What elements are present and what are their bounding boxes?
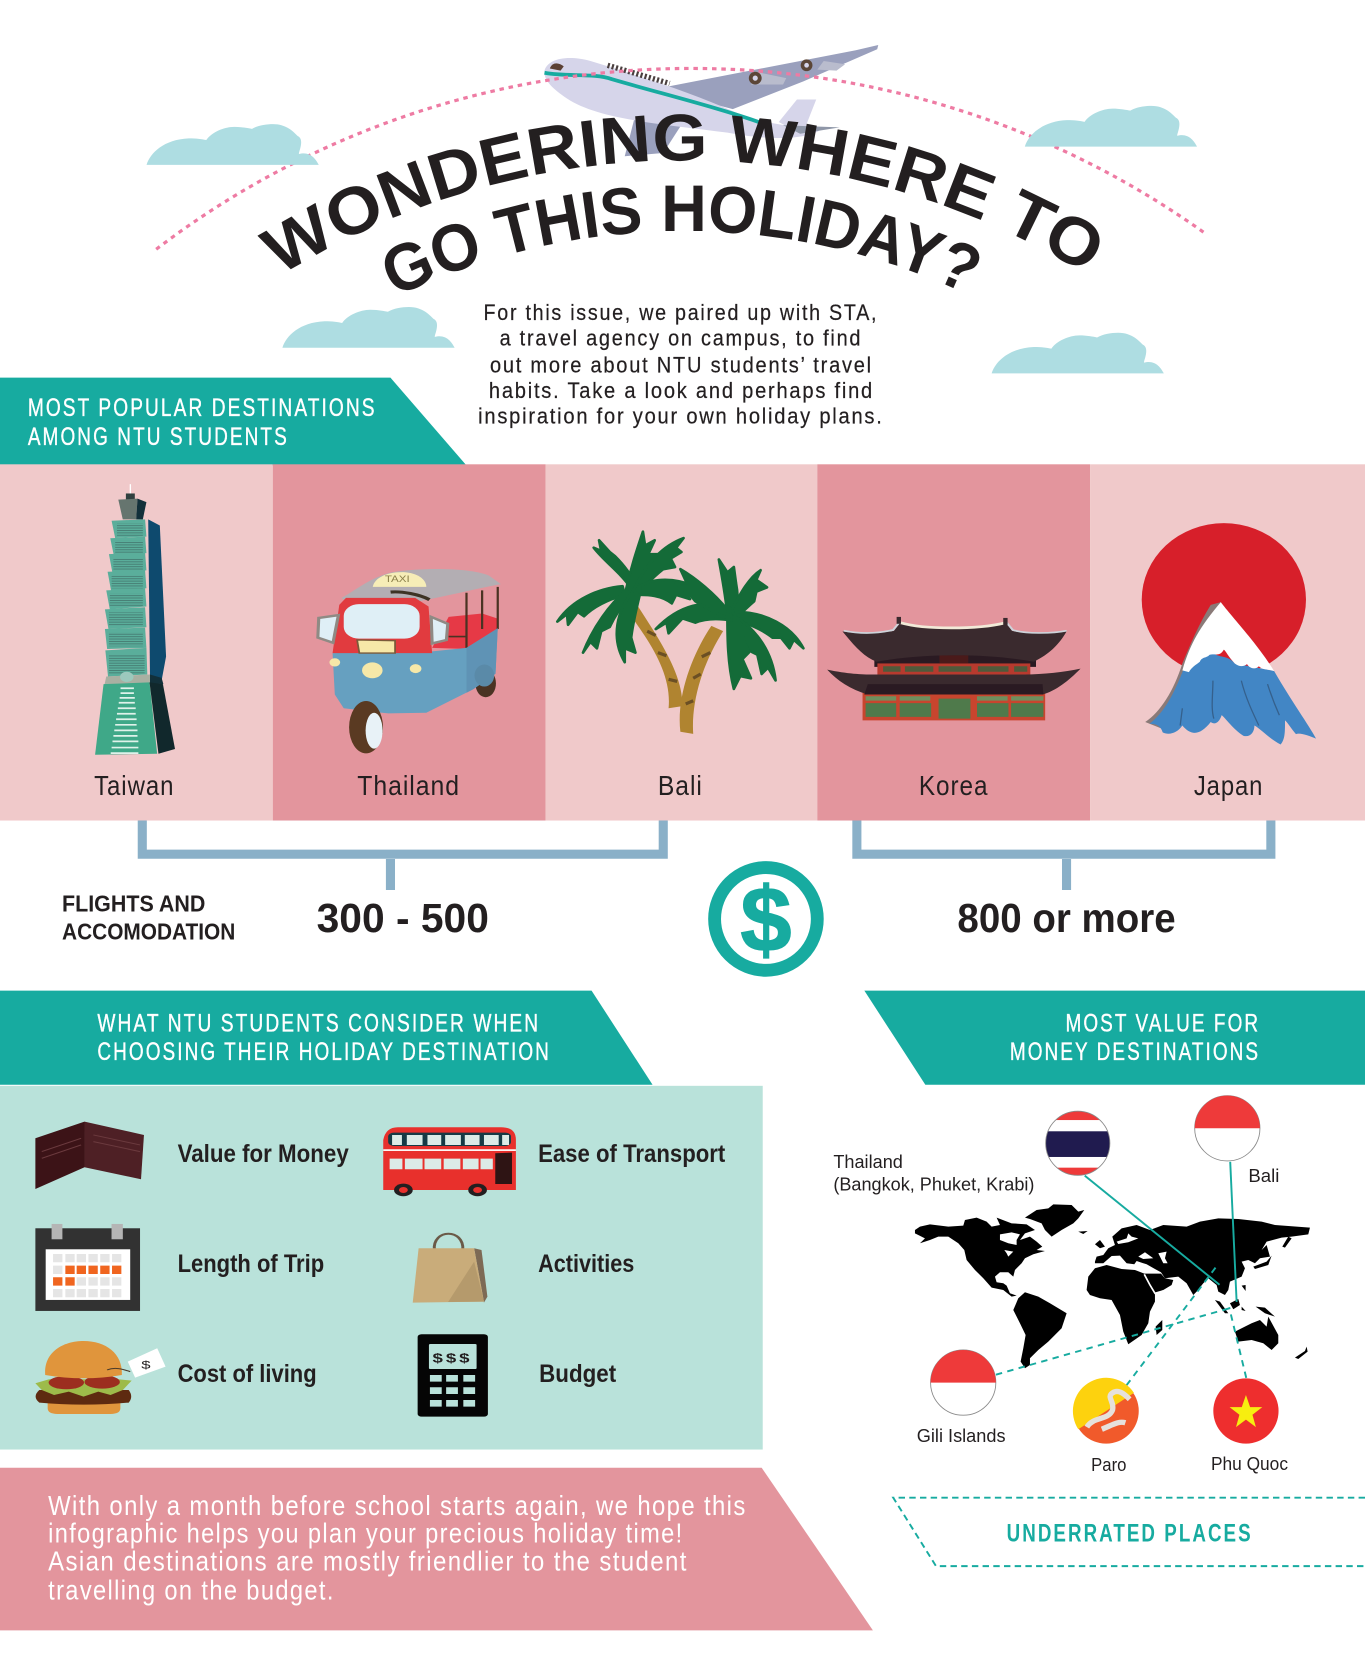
map labels: Bali (1248, 1165, 1279, 1186)
flight path dotted arc (156, 68, 1203, 249)
title: WONDERING WHERE TO (258, 114, 1100, 270)
map labels: (Bangkok, Phuket, Krabi) (833, 1174, 1034, 1195)
flag: Thailand (1045, 1110, 1110, 1177)
panel: Taiwan (0, 464, 273, 821)
label: activities: Activities (538, 1251, 634, 1278)
dashed connectors (996, 1267, 1246, 1385)
price: 300 - 500: 300 - 500 (317, 895, 489, 941)
cloud middle left (282, 307, 455, 348)
map: Europe Asia Africa Oceania (1087, 1218, 1310, 1359)
heading: what NTU students consider: WHAT NTU STUDENTS CONSIDER WHEN (97, 1010, 540, 1037)
intro text: inspiration for your own holiday plans. (478, 404, 884, 429)
label: value for money: Value for Money (178, 1141, 349, 1168)
closing message panel: With only a month before school starts again, we hope this (48, 1490, 747, 1521)
closing message panel: travelling on the budget. (48, 1574, 335, 1605)
heading: most value for money: MONEY DESTINATIONS (1010, 1039, 1260, 1066)
heading: most popular destinations (0, 378, 466, 465)
map labels: Phu Quoc (1211, 1453, 1288, 1474)
label: flights and accomodation (62, 890, 235, 944)
intro text: a travel agency on campus, to find (500, 326, 862, 351)
heading: most value for money: MOST VALUE FOR (1065, 1010, 1260, 1037)
icon: dollar coin (715, 868, 817, 971)
flag: Bali (1195, 1096, 1260, 1161)
intro text (478, 300, 884, 429)
label: flights and accomodation: FLIGHTS AND (62, 890, 205, 916)
world map (915, 1204, 1310, 1368)
solid connector: Thailand (1085, 1176, 1220, 1285)
label: flights and accomodation: ACCOMODATION (62, 918, 235, 944)
panel: Japan (1090, 464, 1365, 821)
panel: Thailand (273, 464, 546, 821)
icon: Korean palace (827, 617, 1081, 720)
bracket: 300 - 500 (142, 821, 663, 890)
heading: most value for money (864, 991, 1365, 1085)
intro text: For this issue, we paired up with STA, (484, 300, 878, 325)
icon: tuk-tuk (318, 569, 501, 753)
icon: calculator: $$$ (433, 1352, 473, 1366)
callout: underrated places: UNDERRATED PLACES (1007, 1521, 1253, 1548)
intro text: habits. Take a look and perhaps find (489, 378, 874, 403)
label: ease of transport: Ease of Transport (538, 1141, 725, 1168)
cloud middle right (992, 333, 1164, 373)
closing message panel: Asian destinations are mostly friendlier to the student (48, 1545, 688, 1576)
title: GO THIS HOLIDAY? (384, 186, 980, 290)
label: Bali: Bali (658, 770, 703, 801)
icon: palm trees (557, 532, 803, 734)
icon: shopping bag (413, 1234, 487, 1303)
panel: Korea (817, 464, 1090, 821)
icon: airplane (544, 45, 878, 156)
label: Thailand: Thailand (357, 770, 460, 801)
label: cost of living: Cost of living (178, 1361, 317, 1388)
label: length of trip: Length of Trip (178, 1251, 324, 1278)
icon: calculator (418, 1334, 488, 1417)
heading: what NTU students consider (0, 991, 653, 1085)
icon: burger with price tag: $ (141, 1359, 151, 1372)
closing message panel: infographic helps you plan your precious holiday time! (48, 1518, 684, 1549)
heading: most popular destinations: MOST POPULAR DESTINATIONS (28, 395, 377, 422)
map labels: Gili Islands (917, 1425, 1006, 1446)
map labels: Paro (1091, 1454, 1126, 1475)
price: 800 or more: 800 or more (957, 895, 1176, 941)
icon: dollar coin: $ (740, 869, 792, 971)
map labels: Thailand (833, 1151, 903, 1172)
icon: calendar (35, 1224, 140, 1311)
icon: wallet (35, 1122, 144, 1189)
solid connector: Bali (1230, 1162, 1237, 1302)
cloud top right (1025, 106, 1197, 147)
heading: what NTU students consider: CHOOSING THEIR HOLIDAY DESTINATION (97, 1039, 551, 1066)
icons group (35, 1122, 516, 1417)
bracket: 800 or more (857, 821, 1271, 890)
map labels (833, 1151, 1288, 1475)
icon: Taipei 101 (95, 484, 175, 755)
panel: Bali (546, 464, 817, 821)
heading: most popular destinations: AMONG NTU STUDENTS (28, 424, 289, 451)
label: budget: Budget (539, 1361, 616, 1388)
icon: burger with price tag (35, 1341, 166, 1414)
closing message panel (0, 1468, 873, 1630)
intro text: out more about NTU students’ travel (490, 352, 873, 377)
label: Japan: Japan (1194, 770, 1263, 801)
flag: Paro (1073, 1378, 1139, 1444)
label: Taiwan: Taiwan (94, 770, 174, 801)
map: Americas and Greenland (915, 1204, 1088, 1368)
icon: tuk-tuk: TAXI (385, 575, 410, 585)
panel: considerations (0, 1086, 763, 1450)
flag: Gili Islands (931, 1350, 996, 1415)
label: Korea: Korea (919, 770, 988, 801)
icon: Mount Fuji and sun (1142, 523, 1316, 744)
flag: Phu Quoc (1213, 1378, 1279, 1444)
callout: underrated places (893, 1498, 1365, 1566)
cloud top left (147, 124, 319, 165)
icon: bus (383, 1127, 516, 1196)
